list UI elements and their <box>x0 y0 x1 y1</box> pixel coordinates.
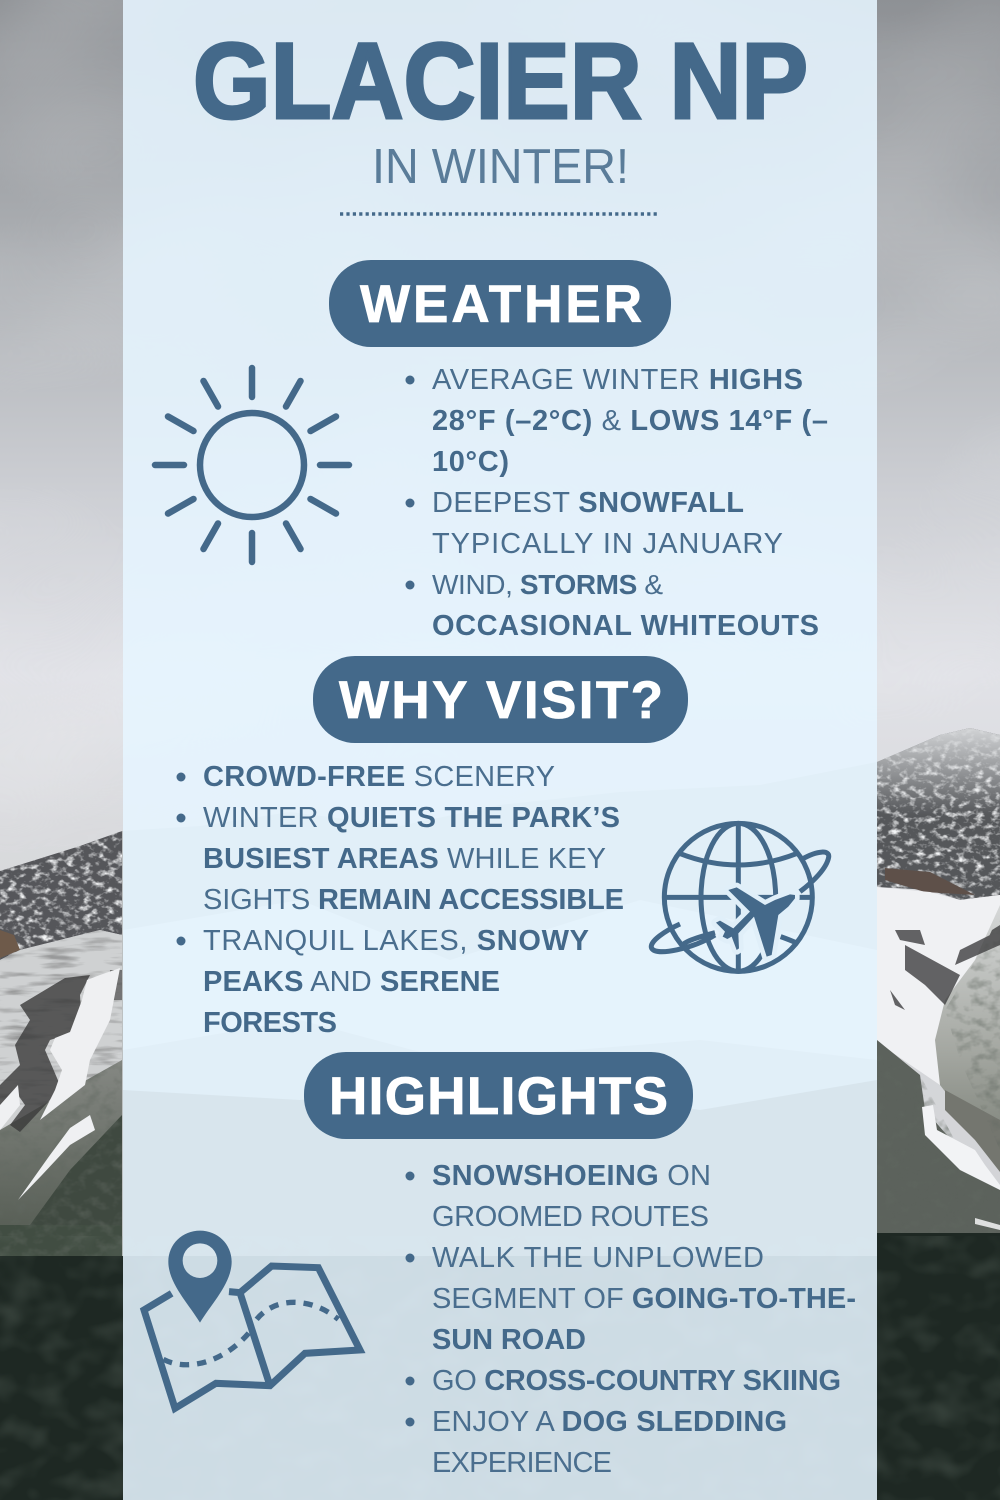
text block: highlights list <box>406 1160 856 1479</box>
text block: highlights list: GROOMED ROUTES <box>432 1201 709 1233</box>
heading: highlights <box>304 1052 693 1139</box>
dotted divider <box>340 212 657 216</box>
icon: sun <box>155 368 349 562</box>
text block: weather list: OCCASIONAL WHITEOUTS <box>432 610 819 642</box>
heading: highlights: HIGHLIGHTS <box>329 1067 668 1126</box>
text block: highlights list: SNOWSHOEING ON <box>432 1160 711 1192</box>
snow patches <box>40 968 120 1120</box>
heading: weather <box>329 260 671 347</box>
text block: highlights list: EXPERIENCE <box>432 1447 612 1479</box>
translucent centre panel <box>123 0 877 1500</box>
text block: why visit list: FORESTS <box>203 1007 337 1039</box>
text block: highlights list: ENJOY A DOG SLEDDING <box>432 1406 787 1438</box>
text block: weather list <box>406 364 828 642</box>
text block: highlights list: WALK THE UNPLOWED <box>432 1242 764 1274</box>
right mountain <box>877 728 1000 900</box>
text block: weather list: TYPICALLY IN JANUARY <box>432 528 783 560</box>
text block: why visit list <box>176 761 624 1039</box>
heading: why visit: WHY VISIT? <box>339 671 663 730</box>
text block: why visit list: CROWD-FREE SCENERY <box>203 761 555 793</box>
text block: weather list: WIND, STORMS & <box>432 569 663 600</box>
left mountain <box>0 831 122 960</box>
subtitle: IN WINTER! <box>372 140 629 194</box>
title: GLACIER NP <box>193 20 808 141</box>
heading: weather: WEATHER <box>360 275 642 334</box>
icon: globe with plane <box>651 823 829 971</box>
text block: why visit list: PEAKS AND SERENE <box>203 966 500 998</box>
text block: why visit list: WINTER QUIETS THE PARK’S <box>203 802 620 834</box>
heading: why visit <box>313 656 688 743</box>
text block: weather list: 10°C) <box>432 446 509 478</box>
text block: why visit list: BUSIEST AREAS WHILE KEY <box>203 843 606 875</box>
icon: map with location pin <box>144 1231 360 1408</box>
forest <box>0 1233 1000 1500</box>
text block: why visit list: SIGHTS REMAIN ACCESSIBLE <box>203 884 624 916</box>
text block: highlights list: GO CROSS-COUNTRY SKIING <box>432 1365 841 1397</box>
text block: highlights list: SEGMENT OF GOING-TO-THE- <box>432 1283 856 1315</box>
text block: weather list: DEEPEST SNOWFALL <box>432 487 744 519</box>
text block: highlights list: SUN ROAD <box>432 1324 586 1356</box>
text block: weather list: AVERAGE WINTER HIGHS <box>432 364 803 396</box>
text block: weather list: 28°F (–2°C) & LOWS 14°F (– <box>432 405 828 437</box>
dark rock streaks <box>0 975 90 1132</box>
text block: why visit list: TRANQUIL LAKES, SNOWY <box>203 925 589 957</box>
mid mountain hidden behind the panel <box>122 762 877 1260</box>
